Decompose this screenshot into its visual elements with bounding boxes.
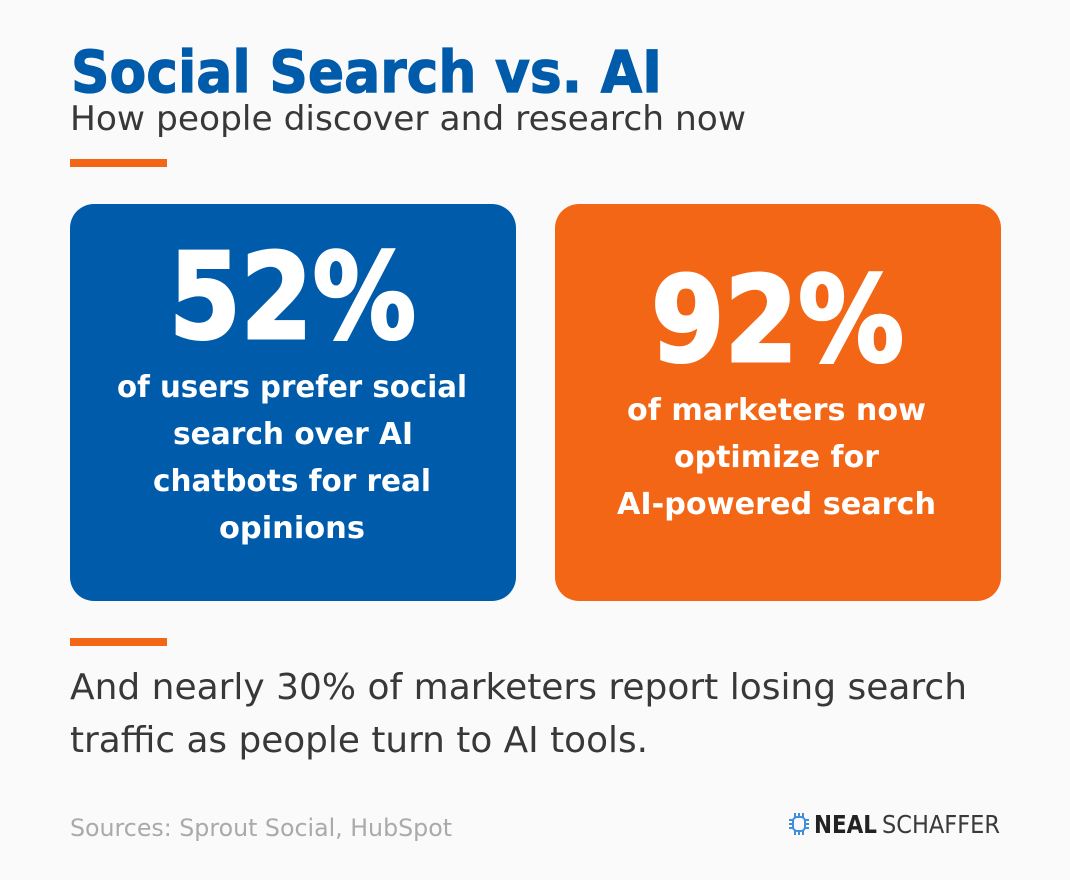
description: social search preference [117,370,467,546]
panel: AI search stat [555,204,1001,601]
closing statement: traffic as people turn to AI tools. [70,720,648,761]
subtitle: How people discover and research now [70,99,746,139]
wordmark: NEAL [814,810,877,839]
description: social search preference: chatbots for real [153,464,431,499]
description: social search preference: opinions [219,511,365,546]
description: social search preference: of users prefer social [117,370,467,405]
description: marketers optimizing: AI-powered search [617,487,936,522]
bottom accent bar [70,638,167,646]
stat: 52%: 52% [169,229,416,367]
stat: 92%: 92% [651,252,904,390]
logo: Neal Schaffer [789,810,1000,839]
description: marketers optimizing: optimize for [674,440,879,475]
title: Social Search vs. AI [71,38,662,106]
logo: Neal Schaffer: SCHAFFER [882,810,1000,839]
description: marketers optimizing [617,393,936,522]
panel: social search stat [70,204,516,601]
description: marketers optimizing: of marketers now [627,393,926,428]
sources: Sources: Sprout Social, HubSpot [70,814,452,842]
description: social search preference: search over AI [173,417,413,452]
icon: chip [789,813,809,835]
closing statement [70,667,967,761]
closing statement: And nearly 30% of marketers report losing search [70,667,967,708]
top accent bar [70,159,167,167]
